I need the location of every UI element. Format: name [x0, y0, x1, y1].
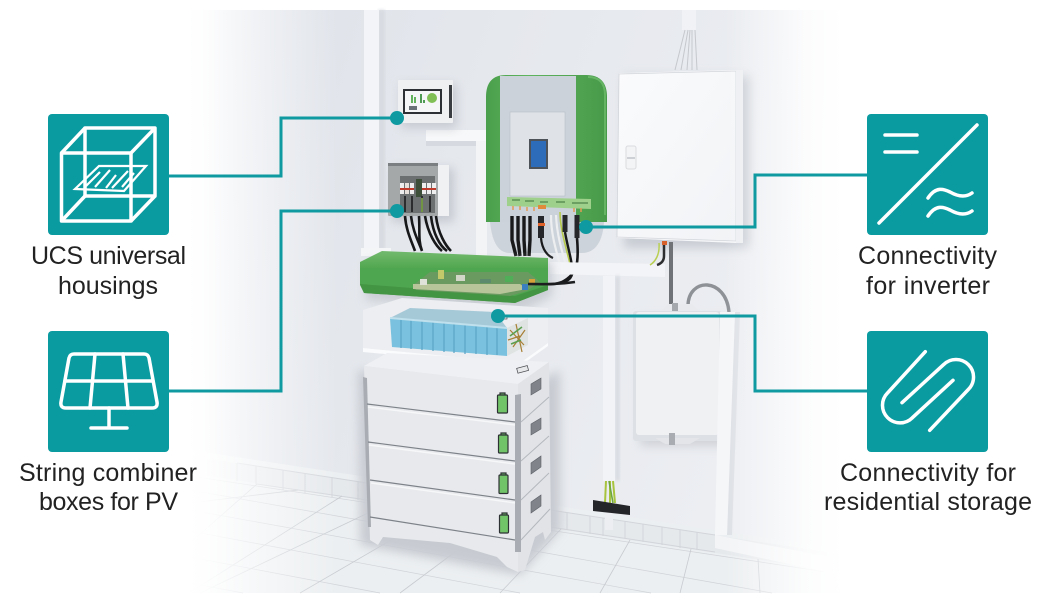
label: String combiner boxes for PV	[19, 459, 197, 516]
right vertical trunking	[715, 312, 835, 574]
touch display	[398, 80, 457, 128]
combiner box	[388, 163, 454, 222]
label: Connectivity for inverter: Connectivity	[858, 242, 998, 270]
connector line: residential storage	[491, 309, 867, 391]
shelf and post	[426, 130, 487, 256]
horizontal and vertical trunking	[550, 262, 665, 530]
inverter cables	[512, 212, 578, 285]
wall	[190, 10, 840, 570]
connector line: inverter connectivity	[579, 175, 867, 234]
battery stack	[358, 353, 560, 575]
battery level icons	[498, 393, 508, 533]
label: Connectivity for residential storage	[824, 459, 1032, 516]
label: UCS universal housings: housings	[58, 272, 158, 300]
opened battery module with cells	[363, 298, 548, 366]
label: Connectivity for residential storage: Connectivity for	[840, 459, 1016, 487]
wires and clamp	[593, 481, 630, 515]
combiner box cables	[405, 216, 451, 251]
inverter connector board	[507, 197, 591, 212]
icon: housing cube with circuit board	[48, 114, 169, 235]
side handles	[531, 378, 541, 513]
connector line: string combiner to box	[169, 204, 404, 391]
cable duct left	[361, 10, 391, 256]
label: Connectivity for residential storage: residential storage	[824, 488, 1032, 516]
fade left	[188, 8, 338, 598]
fade right	[725, 8, 843, 598]
label: UCS universal housings: UCS universal	[31, 242, 186, 270]
icon: paperclip connector	[867, 331, 988, 452]
label: String combiner boxes for PV: String combiner	[19, 459, 197, 487]
label: Connectivity for inverter	[858, 242, 998, 300]
floor	[189, 450, 840, 593]
wall mounted white enclosure	[633, 303, 728, 446]
connector line: UCS housings to display	[169, 111, 404, 176]
room scene photo	[188, 8, 843, 598]
label: UCS universal housings	[31, 242, 186, 300]
distribution cabinet	[617, 10, 750, 248]
label: String combiner boxes for PV: boxes for PV	[39, 488, 178, 516]
inverter	[486, 75, 607, 253]
green housing with electronics	[360, 251, 575, 312]
label: Connectivity for inverter: for inverter	[866, 272, 990, 300]
icon: solar panel	[48, 331, 169, 452]
cables under cabinet	[650, 241, 729, 312]
icon: DC to AC inverter symbol	[867, 114, 988, 235]
